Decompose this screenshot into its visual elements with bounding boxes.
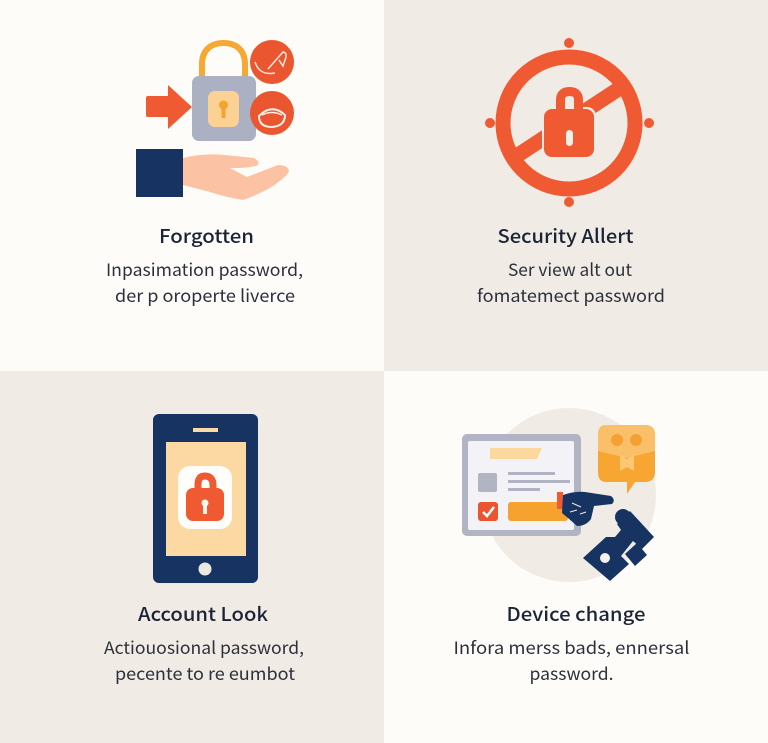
panel: account lock (0, 371, 384, 743)
icon: shirt cuff (136, 149, 183, 197)
icon: pointing hand (562, 492, 614, 526)
text: account description: pecente to re eumbot (115, 660, 296, 685)
text: forgotten description (106, 256, 303, 307)
icon: prohibition bar (518, 88, 620, 155)
panel: forgotten (0, 0, 384, 371)
text: security alert description: fomatemect password (477, 282, 665, 307)
text: security alert description: Ser view alt out (508, 256, 633, 281)
heading: account look: Account Look (138, 600, 268, 627)
icon: compass dots (485, 38, 654, 207)
icon: prohibited lock (485, 38, 654, 207)
heading: security alert: Security Allert (498, 222, 634, 249)
panel: security alert (384, 0, 768, 371)
icon: lock keyhole (566, 130, 573, 146)
heading: device change: Device change (506, 600, 646, 627)
icon: arrow (146, 85, 192, 129)
text: forgotten description: der p oroperte liverce (115, 282, 295, 307)
icon: background circle (482, 408, 656, 582)
icon: hand (183, 154, 289, 200)
icon: padlock body (192, 76, 256, 141)
icon: lock shackle (560, 92, 578, 112)
icon: phone body (153, 414, 258, 583)
heading: forgotten: Forgotten (159, 222, 254, 249)
icon: lock body (186, 488, 224, 521)
icon: padlock shackle (202, 43, 245, 80)
icon: lock keyhole (202, 500, 208, 514)
icon: lock shackle (198, 476, 213, 492)
icon: keyhole plate (208, 91, 239, 127)
text: account description: Actiouosional password, (104, 634, 304, 659)
text: device change description: Infora merss bads, ennersal (454, 634, 690, 659)
icon: phone speaker (193, 428, 218, 432)
text: forgotten description: Inpasimation password, (106, 256, 303, 281)
icon: browser window (462, 434, 581, 536)
panel: device change (384, 371, 768, 743)
icon: top badge (250, 40, 294, 84)
icon: phone screen (166, 442, 246, 556)
icon: phone with lock (153, 414, 258, 583)
icon: padlock with hand (136, 40, 294, 200)
icon: lock body (544, 109, 594, 157)
icon: bottom badge (250, 91, 294, 135)
icon: chat bubble (598, 425, 655, 494)
text: device change description (454, 634, 690, 685)
text: device change description: password. (530, 660, 614, 685)
text: security alert description (477, 256, 665, 307)
icon: wrench tool (583, 509, 654, 581)
icon: home button (198, 562, 212, 576)
icon: lock halo (542, 107, 596, 159)
icon: prohibition ring (503, 57, 635, 189)
icon: app tile (178, 466, 232, 529)
icon: device change illustration (462, 408, 656, 582)
text: account description (104, 634, 304, 685)
